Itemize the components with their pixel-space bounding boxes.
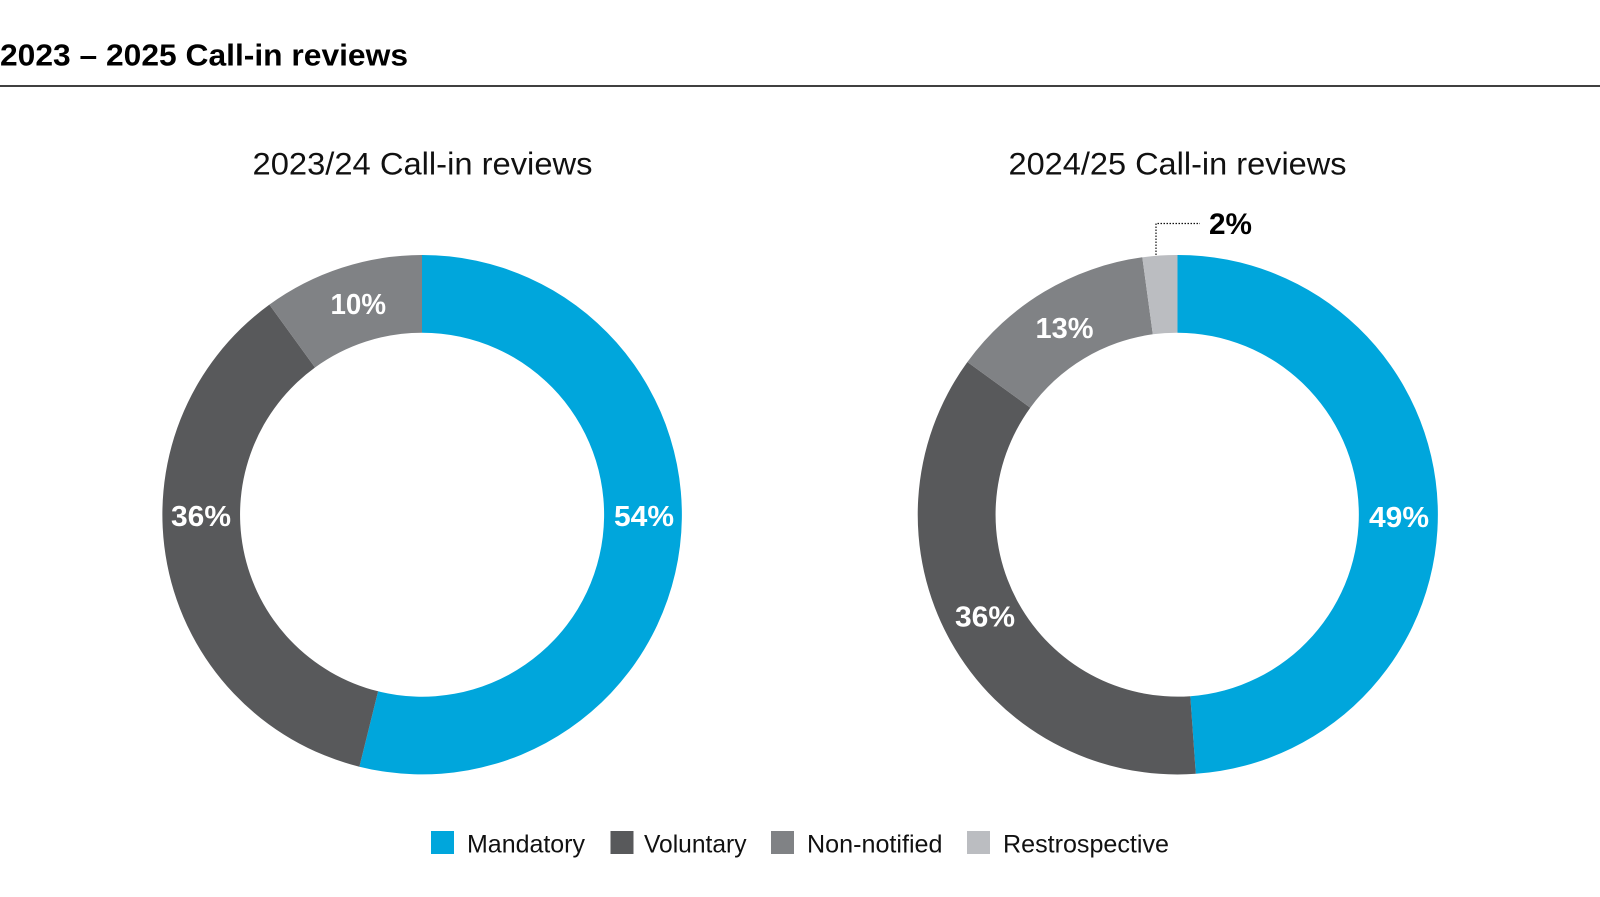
legend item: mandatory: Mandatory xyxy=(467,831,585,859)
legend item: restrospective: Restrospective xyxy=(1003,831,1169,859)
segment: voluntary 36% xyxy=(162,305,378,767)
label: 13%: 13% xyxy=(1036,313,1094,345)
callout leader line xyxy=(1156,224,1200,255)
label: 54%: 54% xyxy=(614,501,674,533)
legend item: non-notified: Non-notified xyxy=(807,831,942,859)
title: 2023 – 2025 Call-in reviews xyxy=(0,38,408,73)
heading: 2023/24: 2023/24 Call-in reviews xyxy=(252,145,592,181)
label: 36%: 36% xyxy=(171,501,231,533)
segment: non-notified 13% xyxy=(967,257,1153,408)
heading: 2024/25: 2024/25 Call-in reviews xyxy=(1008,145,1346,181)
label: 49%: 49% xyxy=(1369,502,1429,534)
panel: 2024/25 chart xyxy=(918,145,1438,774)
segment: mandatory 49% xyxy=(1178,255,1438,774)
donut chart: 2023/24 xyxy=(162,255,682,774)
donut chart: 2024/25 xyxy=(918,255,1438,774)
label: 10%: 10% xyxy=(330,289,386,321)
segment: retrospective 2% xyxy=(1142,255,1178,334)
legend xyxy=(431,831,1169,859)
segment: mandatory 54% xyxy=(359,255,682,774)
callout: 2%: 2% xyxy=(1209,208,1252,241)
label: 36%: 36% xyxy=(955,602,1015,634)
panel: 2023/24 chart xyxy=(162,145,682,774)
segment: non-notified 10% xyxy=(269,255,422,368)
legend item: voluntary: Voluntary xyxy=(644,831,747,859)
segment: voluntary 36% xyxy=(918,362,1196,774)
